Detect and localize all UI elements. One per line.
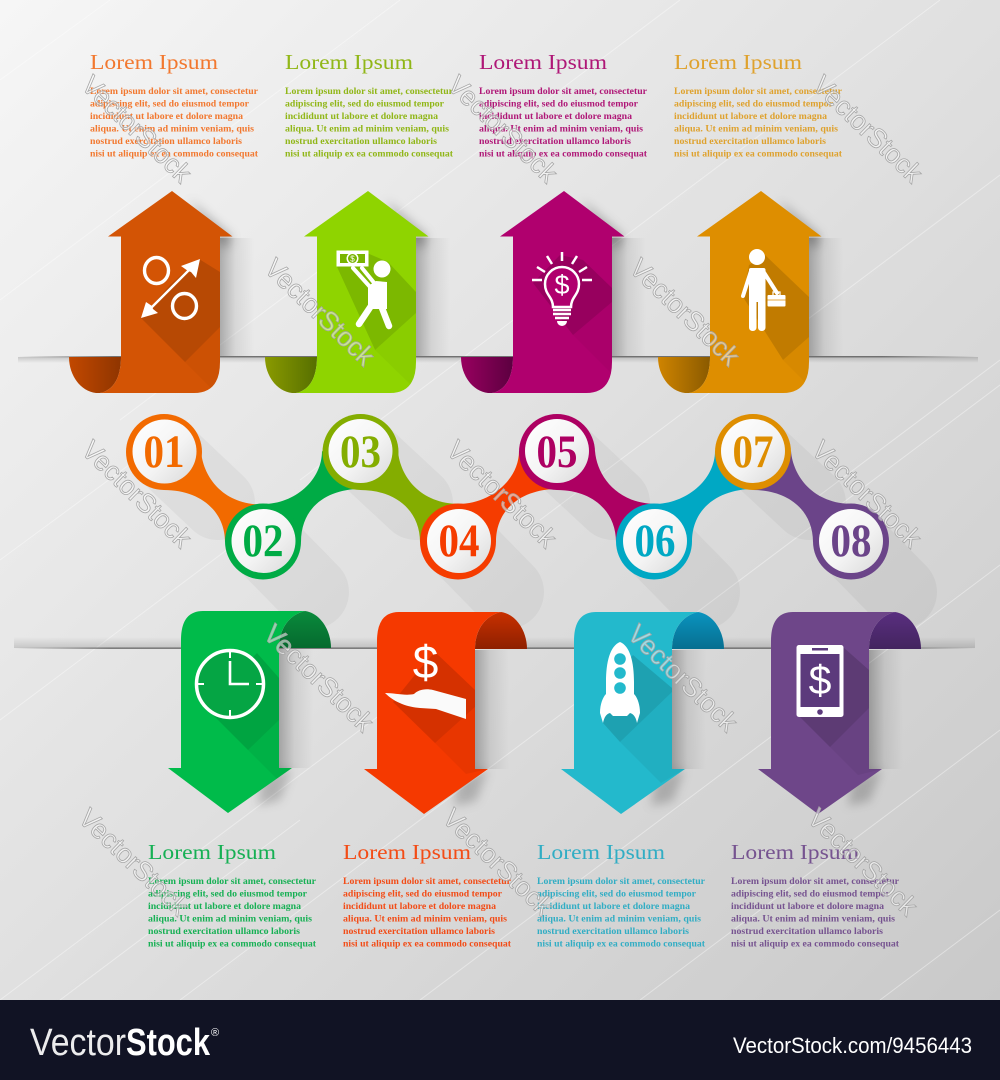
step 02: 02	[242, 515, 284, 567]
heading and text: column 8: nostrud exercitation ullamco laboris	[731, 926, 883, 937]
heading and text: column 3	[479, 50, 648, 160]
step 03: 03	[340, 426, 381, 478]
heading and text: column 3: Lorem Ipsum	[479, 50, 607, 74]
heading and text: column 4: incididunt ut labore et dolore magna	[674, 111, 827, 122]
up arrow 1: orange percent	[69, 191, 254, 402]
step 08	[813, 504, 889, 580]
watermarks: VectorStock	[259, 253, 381, 372]
step 02	[225, 451, 360, 580]
heading and text: column 4: Lorem ipsum dolor sit amet, consectetur	[674, 86, 843, 97]
watermarks: VectorStock	[622, 619, 744, 738]
heading and text: column 1: adipiscing elit, sed do eiusmod tempor	[90, 98, 250, 110]
heading and text: column 1: aliqua. Ut enim ad minim veniam, quis	[90, 124, 254, 134]
step 05: 05	[536, 426, 578, 478]
down arrow 3: cyan rocket	[561, 612, 724, 814]
footer logo: Vector	[30, 1022, 126, 1064]
heading and text: column 2: adipiscing elit, sed do eiusmod tempor	[285, 98, 445, 110]
heading and text: column 6: aliqua. Ut enim ad minim veniam, quis	[343, 914, 507, 924]
heading and text: column 2: nisi ut aliquip ex ea commodo consequat	[285, 148, 454, 160]
numbered timeline	[126, 414, 900, 592]
step 08: 08	[830, 515, 872, 567]
heading and text: column 7	[537, 840, 706, 950]
heading and text: column 7: aliqua. Ut enim ad minim veniam, quis	[537, 914, 701, 924]
heading and text: column 5	[148, 840, 317, 950]
up arrow 3: magenta idea bulb: $	[554, 270, 570, 300]
heading and text: column 8: Lorem ipsum dolor sit amet, consectetur	[731, 876, 900, 887]
up arrow 3: magenta idea bulb	[461, 191, 646, 393]
heading and text: column 1: incididunt ut labore et dolore magna	[90, 111, 243, 122]
step 01: 01	[144, 426, 184, 478]
down arrow 2: red hand with dollar	[364, 612, 527, 814]
heading and text: column 7: Lorem Ipsum	[537, 840, 665, 864]
heading and text: column 1: Lorem Ipsum	[90, 50, 218, 74]
heading and text: column 2: nostrud exercitation ullamco laboris	[285, 136, 437, 147]
heading and text: column 5: Lorem Ipsum	[148, 840, 276, 864]
heading and text: column 3: Lorem ipsum dolor sit amet, consectetur	[479, 86, 648, 97]
step 07	[715, 414, 853, 542]
watermarks: VectorStock	[73, 803, 195, 922]
up arrow 4: amber businessman	[658, 191, 843, 394]
heading and text: column 8: adipiscing elit, sed do eiusmod tempor	[731, 888, 891, 900]
heading and text: column 8: nisi ut aliquip ex ea commodo consequat	[731, 938, 900, 950]
heading and text: column 4	[674, 50, 843, 160]
watermarks: VectorStock	[807, 70, 929, 189]
heading and text: column 5: nisi ut aliquip ex ea commodo consequat	[148, 938, 317, 950]
step 06: 06	[634, 515, 676, 567]
down arrow 4: purple phone with dollar	[758, 612, 921, 814]
step 06	[616, 451, 753, 580]
heading and text: column 2: aliqua. Ut enim ad minim veniam, quis	[285, 124, 449, 134]
heading and text: column 6: incididunt ut labore et dolore magna	[343, 901, 496, 912]
heading and text: column 7: adipiscing elit, sed do eiusmod tempor	[537, 888, 697, 900]
heading and text: column 7: Lorem ipsum dolor sit amet, consectetur	[537, 876, 706, 887]
watermarks: VectorStock	[806, 435, 928, 554]
heading and text: column 4: adipiscing elit, sed do eiusmod tempor	[674, 98, 834, 110]
heading and text: column 2: Lorem Ipsum	[285, 50, 413, 74]
watermarks: VectorStock	[624, 253, 746, 372]
heading and text: column 1: nisi ut aliquip ex ea commodo consequat	[90, 148, 259, 160]
heading and text: column 7: nostrud exercitation ullamco laboris	[537, 926, 689, 937]
heading and text: column 5: incididunt ut labore et dolore magna	[148, 901, 301, 912]
watermarks: VectorStock	[76, 70, 198, 189]
footer registered mark: ®	[211, 1027, 219, 1039]
footer bar	[0, 1000, 1000, 1080]
heading and text: column 7: incididunt ut labore et dolore magna	[537, 901, 690, 912]
heading and text: column 1	[90, 50, 259, 160]
long shadows of the timeline	[164, 451, 900, 592]
watermarks: VectorStock	[442, 70, 564, 189]
watermarks	[73, 70, 929, 922]
watermarks: VectorStock	[802, 803, 924, 922]
heading and text: column 6: adipiscing elit, sed do eiusmod tempor	[343, 888, 503, 900]
heading and text: column 3: adipiscing elit, sed do eiusmod tempor	[479, 98, 639, 110]
heading and text: column 3: aliqua. Ut enim ad minim veniam, quis	[479, 124, 643, 134]
heading and text: column 3: nostrud exercitation ullamco laboris	[479, 136, 631, 147]
watermarks: VectorStock	[258, 619, 380, 738]
step 01	[126, 414, 262, 542]
step 07: 07	[732, 426, 774, 478]
watermarks: VectorStock	[76, 435, 198, 554]
heading and text: column 2: incididunt ut labore et dolore magna	[285, 111, 438, 122]
down arrow 4: purple phone with dollar: $	[809, 657, 832, 703]
watermarks: VectorStock	[441, 435, 563, 554]
step 04: 04	[438, 515, 480, 567]
step 05	[519, 414, 657, 542]
up arrow 2: green man with money: $	[350, 254, 355, 264]
upper slit line	[18, 356, 978, 363]
down arrow 1: green clock	[168, 611, 331, 813]
heading and text: column 4: nisi ut aliquip ex ea commodo consequat	[674, 148, 843, 160]
heading and text: column 2	[285, 50, 454, 160]
watermarks: VectorStock	[437, 803, 559, 922]
heading and text: column 6: Lorem Ipsum	[343, 840, 471, 864]
lower slit line	[14, 637, 975, 649]
heading and text: column 7: nisi ut aliquip ex ea commodo consequat	[537, 938, 706, 950]
heading and text: column 6: nostrud exercitation ullamco laboris	[343, 926, 495, 937]
heading and text: column 5: Lorem ipsum dolor sit amet, consectetur	[148, 876, 317, 887]
step 03	[322, 414, 460, 542]
heading and text: column 5: aliqua. Ut enim ad minim veniam, quis	[148, 914, 312, 924]
up arrow 2: green man with money	[265, 191, 450, 393]
heading and text: column 6: Lorem ipsum dolor sit amet, consectetur	[343, 876, 512, 887]
heading and text: column 8: aliqua. Ut enim ad minim veniam, quis	[731, 914, 895, 924]
heading and text: column 8: incididunt ut labore et dolore magna	[731, 901, 884, 912]
heading and text: column 6	[343, 840, 512, 950]
heading and text: column 4: nostrud exercitation ullamco laboris	[674, 136, 826, 147]
footer image id: VectorStock.com/9456443	[733, 1033, 972, 1058]
heading and text: column 5: nostrud exercitation ullamco laboris	[148, 926, 300, 937]
heading and text: column 2: Lorem ipsum dolor sit amet, consectetur	[285, 86, 454, 97]
heading and text: column 4: aliqua. Ut enim ad minim veniam, quis	[674, 124, 838, 134]
heading and text: column 1: Lorem ipsum dolor sit amet, consectetur	[90, 86, 259, 97]
heading and text: column 6: nisi ut aliquip ex ea commodo consequat	[343, 938, 512, 950]
heading and text: column 4: Lorem Ipsum	[674, 50, 802, 74]
heading and text: column 3: nisi ut aliquip ex ea commodo consequat	[479, 148, 648, 160]
heading and text: column 1: nostrud exercitation ullamco laboris	[90, 136, 242, 147]
footer logo bold part: Stock	[126, 1022, 211, 1064]
heading and text: column 8	[731, 840, 900, 950]
heading and text: column 5: adipiscing elit, sed do eiusmod tempor	[148, 888, 308, 900]
heading and text: column 8: Lorem Ipsum	[731, 840, 859, 864]
down arrow 2: red hand with dollar: $	[413, 636, 438, 688]
heading and text: column 3: incididunt ut labore et dolore magna	[479, 111, 632, 122]
step 04	[420, 451, 557, 580]
